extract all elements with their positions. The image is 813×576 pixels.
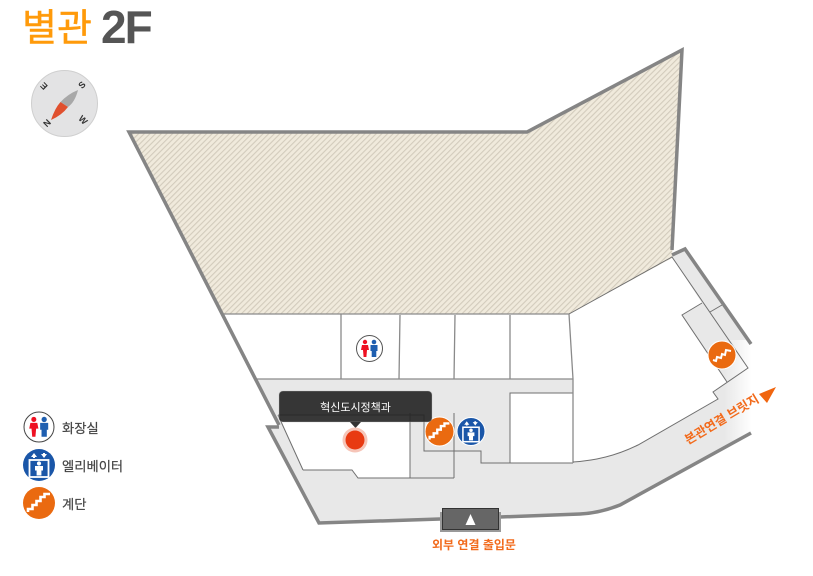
legend: stairs: 계단 [62,497,86,512]
entrance label: 외부 연결 출입문 [432,537,516,552]
icon: compass [32,70,98,136]
east stair room lines [569,257,748,462]
icon: compass: W [76,113,90,127]
title: 별관 [22,8,92,50]
title: 2F [101,1,152,53]
bridge fade [724,340,752,440]
legend: elevator: 엘리베이터 [62,459,123,474]
legend [23,412,123,519]
legend: restroom: 화장실 [62,421,99,436]
upper rooms strip lines [222,314,573,463]
grey corridor floor [257,247,760,523]
hatched restricted area [129,50,682,314]
callout: location tooltip: 혁신도시정책과 [320,401,391,414]
room partition lines [278,393,573,478]
icon: compass: E [38,80,50,92]
callout: location tooltip [279,391,432,428]
entrance door [440,508,501,532]
icon: compass: S [76,79,88,91]
icon: stairs on plan centre [425,417,454,446]
panel: floor plan [129,50,771,523]
outer walls [129,50,751,523]
white room beside corridor [510,393,573,463]
icon: restroom on plan [356,336,382,362]
location marker [342,428,368,452]
icon: compass: N [41,117,53,129]
bridge label: 본관연결 브릿지 [682,392,762,447]
title [22,1,152,53]
icon: stairs on plan east [708,341,736,369]
icon: elevator on plan [457,418,485,446]
white office room [278,415,410,478]
arrow: to bridge [759,387,776,403]
